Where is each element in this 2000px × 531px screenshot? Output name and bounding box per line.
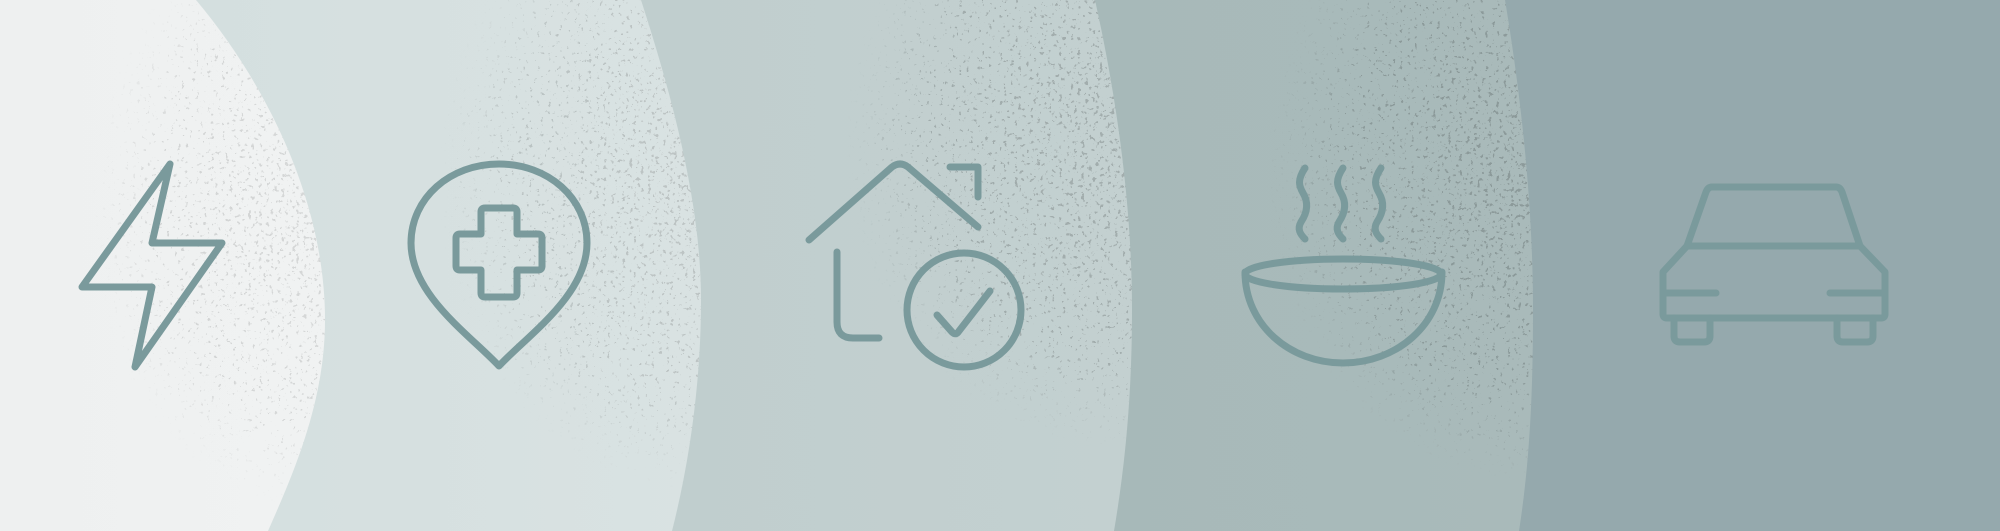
panel: soup bowl band xyxy=(1095,0,1533,531)
icon: car xyxy=(1663,187,1885,342)
panel: medical pin band xyxy=(196,0,701,531)
panel: lightning band xyxy=(0,0,325,531)
icon: steaming soup bowl xyxy=(1245,168,1442,363)
panel: house check band xyxy=(641,0,1132,531)
icon: lightning bolt xyxy=(82,164,222,367)
icon: map pin with medical cross xyxy=(411,164,587,366)
icon: house with check mark xyxy=(809,164,1021,367)
panel: car on darkest band xyxy=(1500,0,2000,531)
